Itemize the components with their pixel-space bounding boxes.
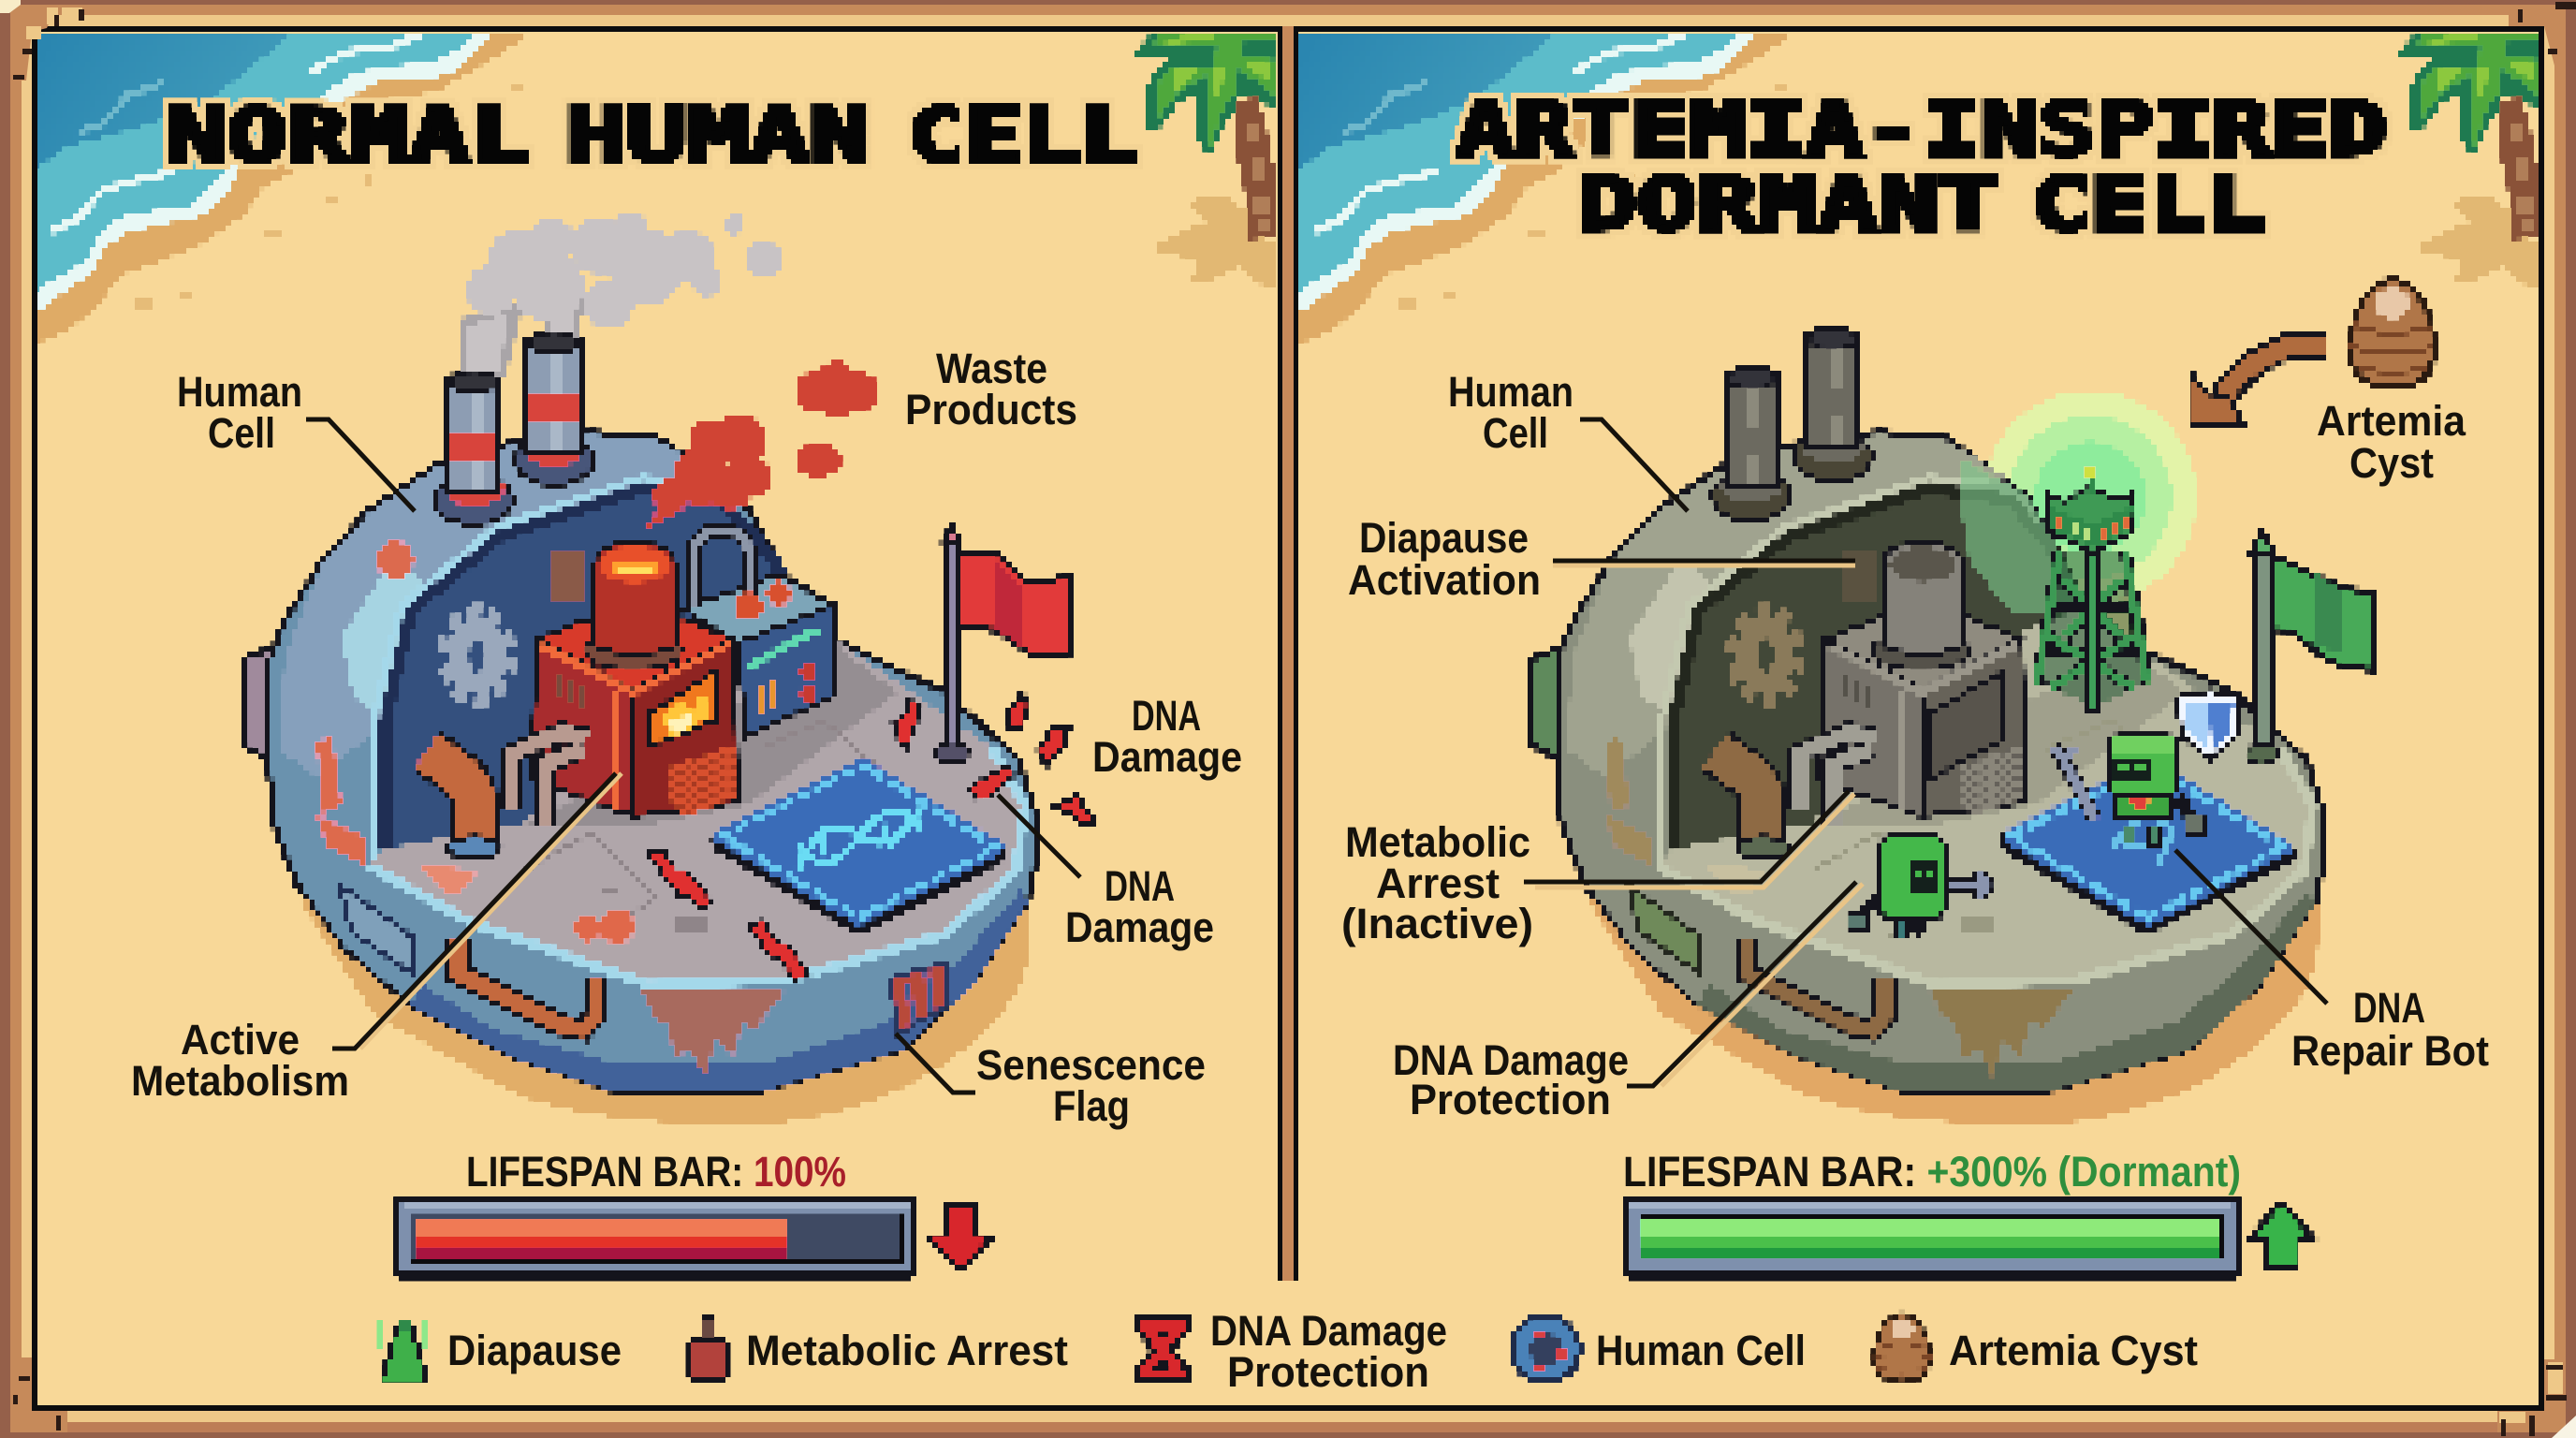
floor stain xyxy=(575,910,635,944)
label: metabolic arrest: (Inactive) xyxy=(1341,900,1533,947)
dormant shell xyxy=(1531,433,2324,1123)
legend: dna damage protection: DNA Damage xyxy=(1210,1307,1447,1355)
title: normal human cell: NORMAL xyxy=(166,95,531,179)
label: human cell (left) xyxy=(177,368,415,511)
label: senescence flag: Senescence xyxy=(976,1041,1206,1089)
furnace flame window xyxy=(650,671,715,746)
dna damage shards xyxy=(648,695,1093,980)
label: metabolic arrest xyxy=(1341,791,1854,947)
label: senescence flag: Flag xyxy=(1053,1082,1130,1130)
label: dna damage upper: Damage xyxy=(1092,733,1242,781)
legend icon diapause xyxy=(382,1318,427,1382)
dome green tint xyxy=(1961,459,2084,613)
legend: human cell: Human Cell xyxy=(1596,1327,1806,1374)
legend: metabolic arrest: Metabolic Arrest xyxy=(746,1327,1068,1374)
red flag xyxy=(936,527,1068,763)
label: dna repair bot xyxy=(2175,850,2489,1075)
label: artemia cyst: Artemia xyxy=(2317,397,2466,445)
repair bot 1 xyxy=(1848,835,1986,941)
label: active metabolism xyxy=(131,773,622,1105)
legend icon cyst xyxy=(1874,1314,1930,1381)
waste cloud xyxy=(646,361,878,529)
label: human cell (right): Cell xyxy=(1483,409,1548,457)
rust spot xyxy=(376,541,414,579)
label: human cell (right): Human xyxy=(1448,368,1573,416)
lifespan arrow up xyxy=(2250,1204,2312,1269)
legend: dna damage protection: Protection xyxy=(1227,1348,1429,1396)
dormant gear and pipe xyxy=(1715,552,1857,859)
furnace glow top xyxy=(612,560,657,573)
lifespan label right: LIFESPAN BAR: +300% (Dormant) xyxy=(1623,1148,2241,1196)
label: waste products: Products xyxy=(905,386,1077,433)
dormant pad xyxy=(2011,766,2284,923)
label: human cell (right) xyxy=(1448,368,1688,511)
cyst egg xyxy=(2350,279,2435,387)
label: dna repair bot: Repair Bot xyxy=(2291,1027,2489,1075)
label: diapause activation xyxy=(1348,514,1855,604)
legend icon dna xyxy=(1134,1325,1191,1374)
label: human cell (left): Cell xyxy=(208,409,275,457)
panel art: dormant cell xyxy=(1531,329,2324,1123)
small pipes xyxy=(512,732,587,824)
dormant small pipes xyxy=(1800,732,1875,824)
chimneys xyxy=(434,332,593,524)
label: dna repair bot: DNA xyxy=(2353,984,2425,1032)
label: diapause activation: Diapause xyxy=(1359,514,1529,562)
label: artemia cyst xyxy=(2317,397,2466,487)
lifespan label left: LIFESPAN BAR: 100% xyxy=(466,1148,846,1196)
label: active metabolism: Metabolism xyxy=(131,1057,349,1105)
diapause tower xyxy=(2037,466,2147,712)
label: diapause activation: Activation xyxy=(1348,556,1541,604)
label: dna damage lower xyxy=(998,795,1214,951)
console machine xyxy=(683,530,834,737)
title: artemia-inspired dormant cell: CELL xyxy=(2031,163,2265,247)
legend icon human cell xyxy=(1512,1317,1579,1381)
label: dna damage upper: DNA xyxy=(1132,692,1201,740)
tower glow xyxy=(1984,391,2196,603)
dormant door xyxy=(1930,671,2003,779)
furnace stairs xyxy=(671,745,736,816)
title: normal human cell: CELL xyxy=(908,95,1137,179)
label: dna damage upper xyxy=(1092,692,1242,781)
beach scene: left panel xyxy=(35,32,1278,344)
cyst arrow xyxy=(2191,346,2327,423)
data pad with dna xyxy=(723,766,996,923)
label: waste products xyxy=(905,345,1077,433)
legend: dna damage protection xyxy=(1210,1307,1447,1396)
furnace xyxy=(531,543,738,816)
dormant stairs xyxy=(1959,745,2024,816)
label: artemia cyst: Cyst xyxy=(2349,439,2434,487)
label: active metabolism: Active xyxy=(181,1016,300,1064)
label: metabolic arrest: Arrest xyxy=(1376,859,1500,907)
blue shield xyxy=(2177,691,2241,760)
label: dna damage protection: Protection xyxy=(1410,1076,1611,1123)
label: dna damage lower: DNA xyxy=(1105,862,1175,910)
label: metabolic arrest: Metabolic xyxy=(1345,818,1530,866)
title: artemia-inspired dormant cell: DORMANT xyxy=(1577,163,1998,247)
cell shell xyxy=(243,433,1036,1123)
lifespan arrow down xyxy=(929,1204,991,1269)
legend icon bottle xyxy=(691,1316,725,1380)
green flag xyxy=(2247,532,2371,764)
label: human cell (left): Human xyxy=(177,368,302,416)
label: dna damage protection: DNA Damage xyxy=(1393,1036,1629,1084)
beach scene: right panel xyxy=(1298,32,2541,344)
smoke xyxy=(459,213,782,374)
legend: artemia cyst: Artemia Cyst xyxy=(1949,1327,2198,1374)
label: dna damage lower: Damage xyxy=(1065,903,1214,951)
senescence panel xyxy=(891,962,944,1035)
panel art: normal human cell xyxy=(243,213,1093,1123)
label: dna damage protection xyxy=(1393,882,1863,1123)
label: senescence flag xyxy=(896,1034,1206,1130)
repair bot 2 xyxy=(2054,735,2204,847)
legend: diapause: Diapause xyxy=(447,1327,622,1374)
title: normal human cell: HUMAN xyxy=(565,95,871,179)
title: artemia-inspired dormant cell xyxy=(1456,88,2387,247)
gear and big pipe xyxy=(427,552,569,859)
lifespan bar frame left xyxy=(397,1200,914,1275)
title: artemia-inspired dormant cell: ARTEMIA-INSPIRED xyxy=(1456,88,2387,172)
dormant chimneys xyxy=(1712,329,1872,521)
dormant furnace xyxy=(1819,543,2026,816)
lifespan bar frame right xyxy=(1626,1200,2238,1275)
label: waste products: Waste xyxy=(936,345,1047,392)
